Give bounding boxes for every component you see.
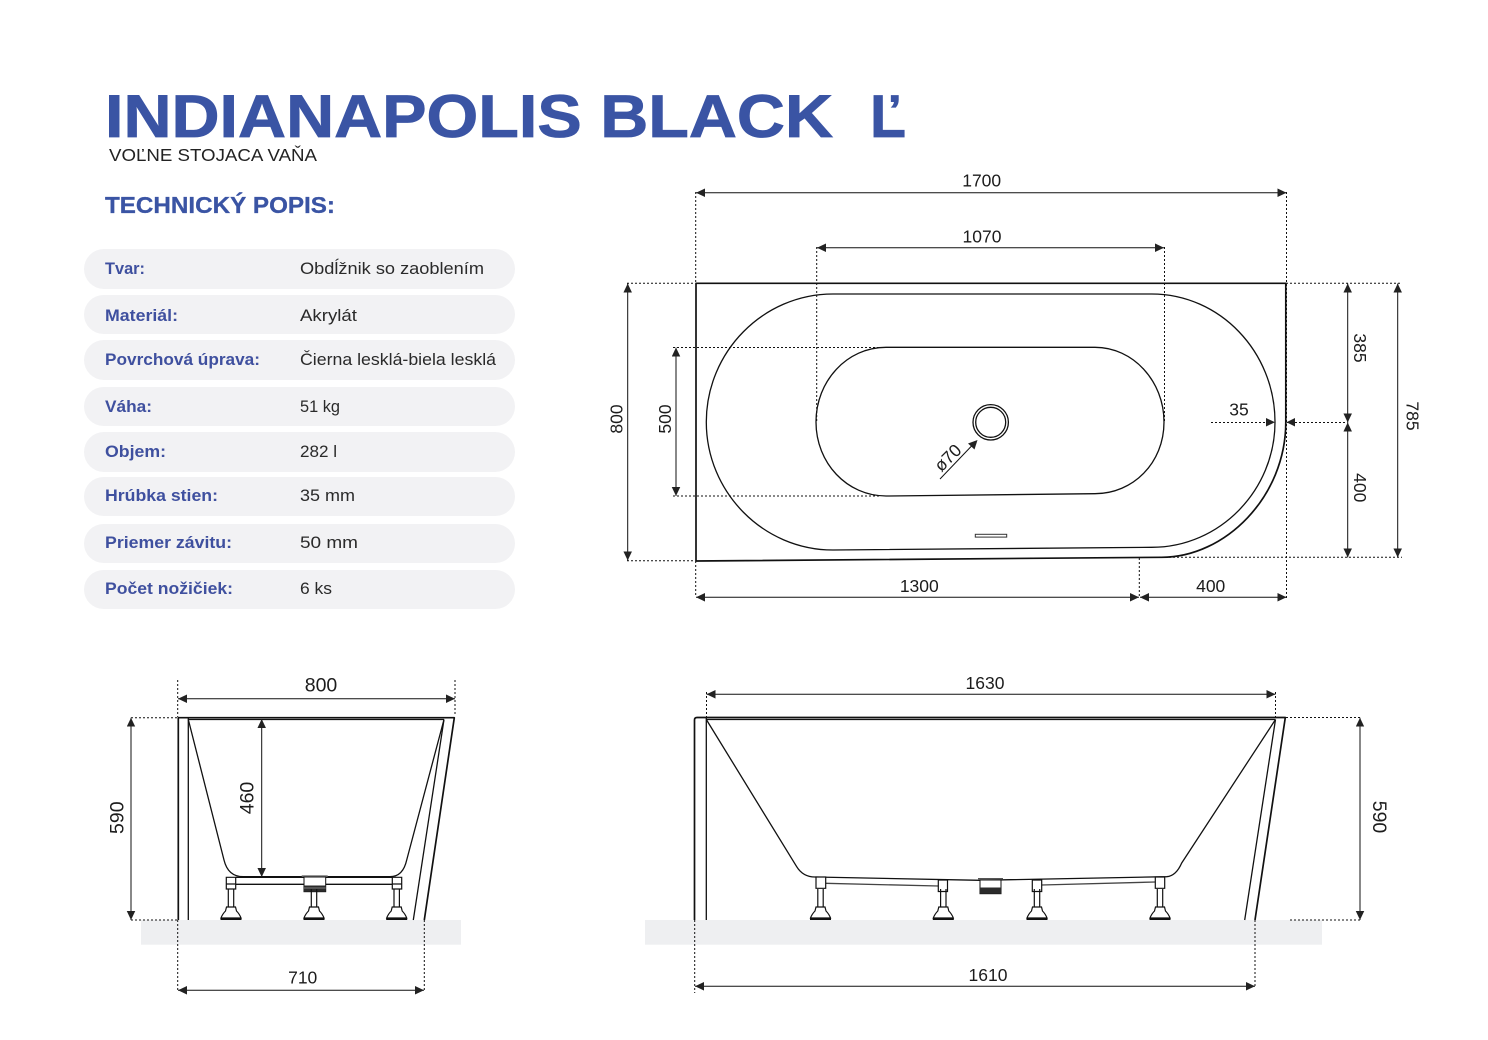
dimension: 590: 590 (106, 801, 128, 834)
drawing: top view (607, 171, 1423, 600)
row: volume: Objem: (105, 443, 166, 461)
tub rim outline (706, 294, 1275, 550)
dimension: 385 (1348, 284, 1370, 422)
top view outer outline (696, 283, 1286, 561)
drawing: side view (645, 673, 1390, 993)
dimension: 400 vertical: 400 (1350, 473, 1370, 503)
dimension: 400 horizontal: 400 (1196, 576, 1226, 596)
foot 4 (1150, 889, 1170, 920)
dimension: 1630: 1630 (966, 673, 1005, 693)
title: INDIANAPOLIS BLACK (105, 83, 833, 150)
row: thread diameter: Priemer závitu: (105, 534, 232, 552)
foot 3 (1026, 889, 1048, 920)
dimension: drain diameter 70 (930, 440, 978, 479)
row: wall thickness: 35 mm (300, 486, 355, 505)
foot 2 (933, 889, 954, 920)
frame brackets (226, 877, 402, 889)
dimension: 710: 710 (288, 968, 318, 988)
row: volume (84, 432, 515, 472)
dimension: 1300: 1300 (900, 576, 939, 596)
row: weight (84, 387, 515, 426)
row: wall thickness (84, 477, 515, 516)
waste trap (978, 879, 1003, 894)
heading: technical description: TECHNICKÝ POPIS: (105, 191, 335, 218)
overflow slot (975, 534, 1007, 537)
dimension: 785: 785 (1403, 401, 1423, 431)
end view bathtub shell (178, 718, 454, 920)
floor band (645, 920, 1322, 945)
foot: left (220, 889, 242, 920)
basin profile (706, 720, 1276, 880)
row: surface finish: Povrchová úprava: (105, 351, 260, 369)
dimension: 1610: 1610 (969, 965, 1008, 985)
row: shape: Tvar: (105, 260, 145, 278)
dimension: 800: 800 (305, 675, 337, 697)
row: number of feet: Počet nožičiek: (105, 580, 233, 598)
drain circle (973, 405, 1008, 440)
panel: specification table (84, 249, 515, 609)
foot: centre (304, 889, 324, 920)
foot 1 (810, 889, 831, 920)
extension lines (695, 692, 1362, 993)
dimension: 500: 500 (655, 404, 675, 434)
dimension: 35 (1229, 400, 1295, 426)
row: volume: 282 l (300, 442, 337, 461)
basin profile (188, 720, 444, 877)
row: material: Akrylát (300, 306, 357, 325)
frame brackets (816, 877, 1165, 892)
dimension: 35: 35 (1229, 400, 1249, 420)
extension lines (131, 680, 455, 990)
dimension: 1700: 1700 (962, 171, 1001, 191)
dimension: 385: 385 (1350, 333, 1370, 363)
inner wall and rim (706, 718, 1276, 920)
dimension: 800: 800 (607, 404, 627, 434)
row: surface finish: Čierna lesklá-biela lesklá (300, 350, 497, 369)
row: shape: Obdĺžnik so zaoblením (300, 259, 484, 278)
dimension: 400 vertical (1348, 422, 1370, 558)
drawing: end view (106, 675, 461, 990)
dimension: drain diameter 70: ø70 (930, 440, 966, 475)
row: shape (84, 249, 515, 289)
waste trap (302, 876, 328, 892)
row: weight: Váha: (105, 398, 152, 416)
row: number of feet: 6 ks (300, 579, 332, 598)
row: weight: 51 kg (300, 397, 340, 416)
dimension: 460: 460 (237, 782, 259, 814)
title: Ľ (870, 83, 906, 150)
row: thread diameter: 50 mm (300, 533, 358, 552)
row: number of feet (84, 570, 515, 609)
row: surface finish (84, 340, 515, 380)
support frame (826, 882, 1155, 886)
side view bathtub shell (694, 718, 1285, 920)
support frame (236, 877, 392, 884)
extension lines (627, 192, 1402, 600)
basin outline (816, 347, 1164, 496)
dimension: 1070: 1070 (963, 227, 1002, 247)
row: material: Materiál: (105, 307, 178, 325)
dimension: 590: 590 (1368, 801, 1390, 833)
row: thread diameter (84, 524, 515, 563)
inner wall and rim (188, 718, 444, 920)
foot: right (386, 889, 407, 920)
row: material (84, 295, 515, 334)
row: wall thickness: Hrúbka stien: (105, 487, 218, 505)
subtitle: VOĽNE STOJACA VAŇA (109, 145, 317, 165)
floor band (141, 920, 461, 945)
